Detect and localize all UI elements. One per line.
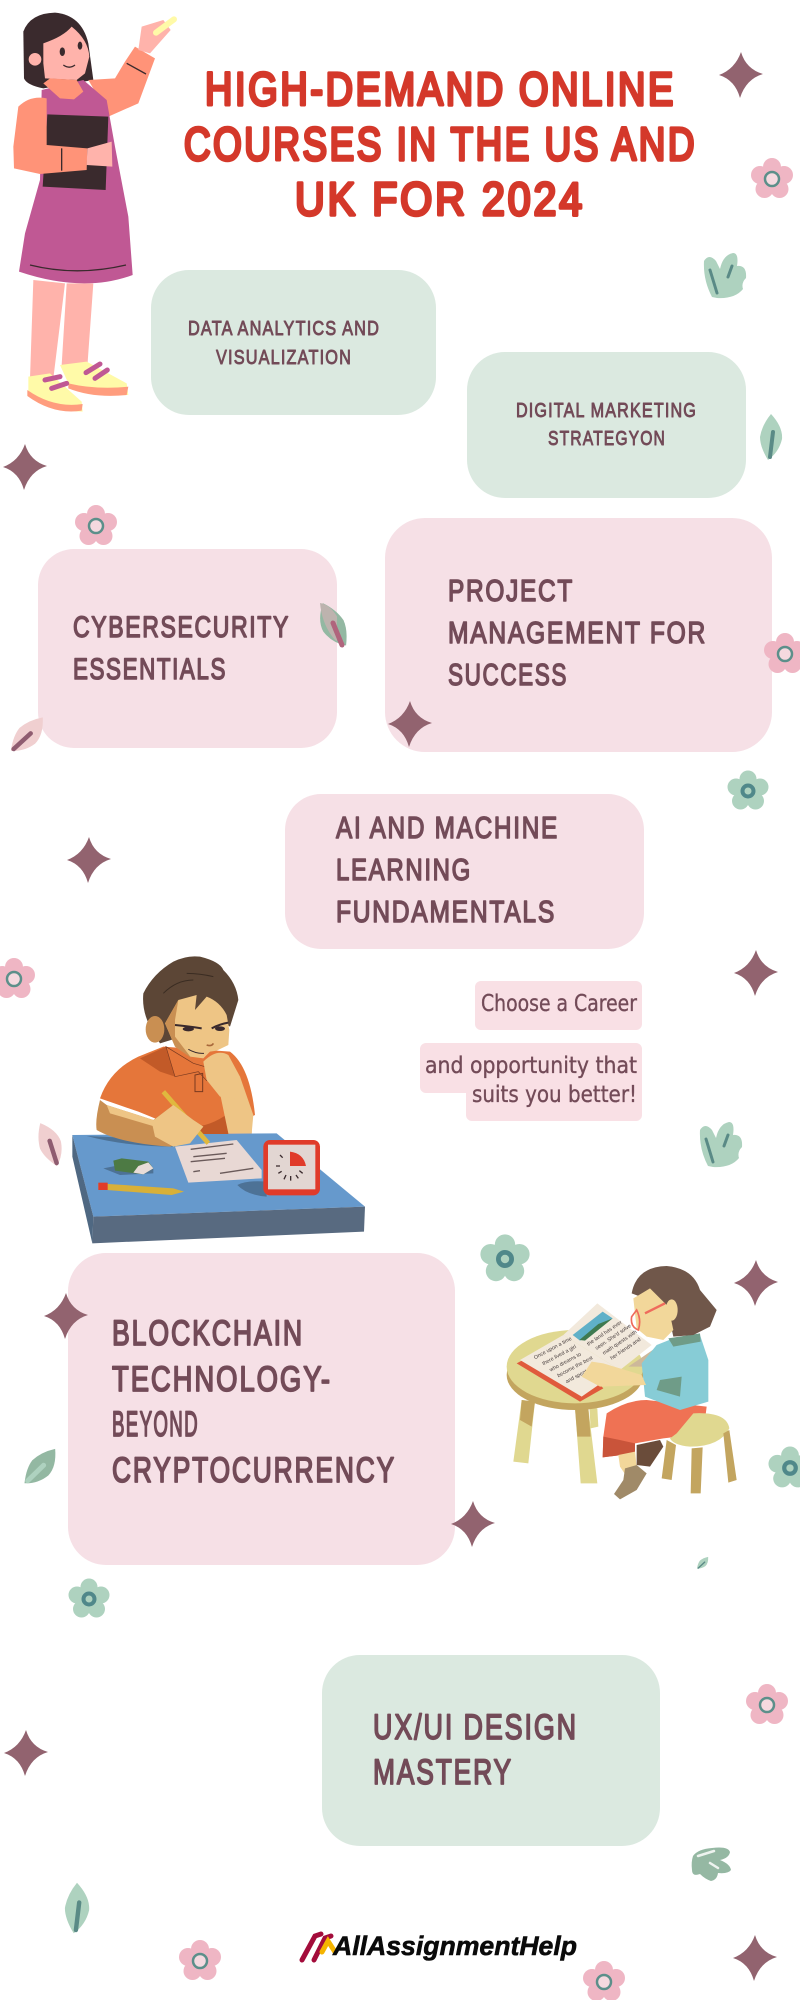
callout text	[425, 991, 637, 1108]
title: HIGH-DEMAND ONLINE	[205, 63, 676, 115]
card text	[188, 318, 380, 369]
card text: DATA ANALYTICS AND	[188, 318, 380, 340]
card text: UX/UI DESIGN	[373, 1708, 578, 1747]
illustration: girl reading at round table: become the best	[556, 1355, 595, 1379]
illustration: girl reading at round table: the land has ever	[586, 1320, 624, 1348]
card text	[373, 1708, 578, 1792]
card text: VISUALIZATION	[216, 347, 352, 369]
panel: project management	[385, 518, 772, 752]
callout text: and opportunity that	[425, 1053, 637, 1079]
callout text: Choose a Career	[481, 991, 637, 1017]
card text	[112, 1314, 396, 1490]
illustration: girl reading at round table	[507, 1266, 737, 1499]
illustration: girl reading at round table: seen. She'd solve	[594, 1323, 633, 1352]
illustration: teacher with chalk	[13, 13, 174, 412]
card background	[322, 1655, 660, 1846]
card text: PROJECT	[448, 573, 574, 608]
card text: FUNDAMENTALS	[336, 894, 556, 929]
card text: MASTERY	[373, 1753, 513, 1792]
callout: choose a career	[420, 981, 642, 1121]
card text: LEARNING	[336, 852, 472, 887]
logo wordmark: AllAssignmentHelp	[332, 1931, 577, 1961]
card background	[285, 794, 644, 949]
card background	[38, 549, 337, 748]
illustration: girl reading at round table: there lived a girl	[541, 1344, 577, 1367]
card background	[151, 270, 436, 415]
card text: CRYPTOCURRENCY	[112, 1451, 396, 1490]
illustration: girl reading at round table: who dreams to	[549, 1352, 582, 1373]
title	[184, 63, 697, 225]
card text: BLOCKCHAIN	[112, 1314, 304, 1353]
panel: blockchain	[68, 1253, 455, 1565]
card text: ESSENTIALS	[73, 653, 227, 686]
illustration: girl reading at round table: and spent all	[565, 1366, 594, 1385]
panel: digital marketing	[467, 352, 746, 498]
card text	[516, 400, 697, 450]
panel: cybersecurity	[38, 549, 337, 748]
callout text: suits you better!	[472, 1082, 637, 1108]
card text: STRATEGYON	[548, 428, 666, 450]
card text	[448, 573, 707, 692]
card text: DIGITAL MARKETING	[516, 400, 697, 422]
card background	[68, 1253, 455, 1565]
card text: AI AND MACHINE	[336, 810, 559, 845]
decorative green flowers	[68, 770, 800, 1618]
callout highlight: first line	[475, 981, 642, 1030]
card text	[73, 611, 290, 686]
card text	[336, 810, 559, 929]
illustration: girl reading at round table: math quests with	[602, 1329, 638, 1357]
card text: BEYOND	[112, 1405, 199, 1444]
callout highlight: second and third lines	[420, 1043, 642, 1121]
illustration: girl reading at round table: Once upon a time	[533, 1336, 573, 1361]
card text: SUCCESS	[448, 657, 568, 692]
panel: UX/UI design	[322, 1655, 660, 1846]
illustration: boy at desk with timer	[72, 956, 365, 1243]
panel: AI and machine learning	[285, 794, 644, 949]
panel: data analytics	[151, 270, 436, 415]
logo mark	[302, 1934, 335, 1960]
illustration: girl reading at round table: her friends and	[609, 1337, 642, 1362]
card background	[467, 352, 746, 498]
logo: AllAssignmentHelp	[302, 1931, 577, 1961]
card text: TECHNOLOGY-	[112, 1360, 332, 1399]
card text: CYBERSECURITY	[73, 611, 290, 644]
card text: MANAGEMENT FOR	[448, 615, 707, 650]
title: UK FOR 2024	[295, 173, 585, 225]
card background	[385, 518, 772, 752]
